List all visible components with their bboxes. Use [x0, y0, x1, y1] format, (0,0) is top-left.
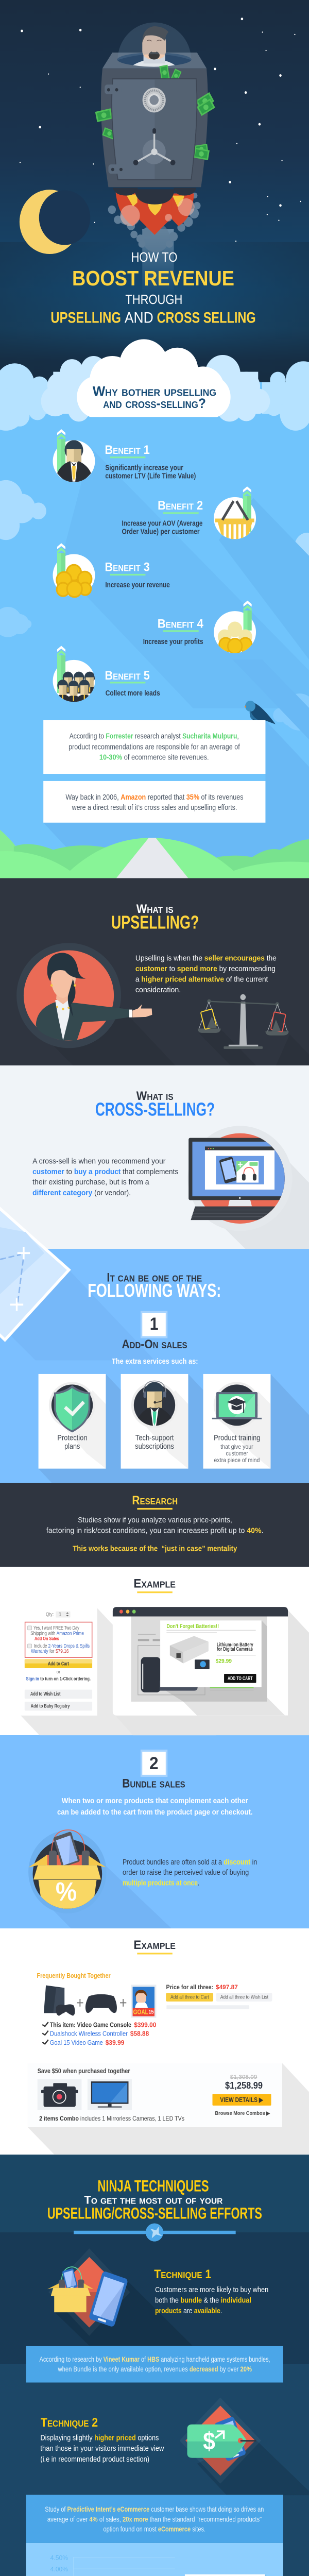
heading: following ways: FOLLOWING WAYS: [88, 1280, 221, 1301]
panel: bundle examples [28, 1983, 309, 2346]
heading: add-on sales: Add-On sales [122, 1338, 187, 1351]
heading: what is upselling: UPSELLING? [111, 912, 199, 933]
hinges [105, 84, 125, 174]
technique 2: than those in your visitors immediate view [40, 2445, 164, 2453]
text: bundle discount [123, 1858, 257, 1888]
background: ways blue section [0, 1249, 309, 1483]
panel: techniques 1-2 evidence [26, 2346, 309, 2576]
panel: research: Research [132, 1494, 178, 1507]
heading: ninja techniques [47, 2178, 262, 2223]
stars [20, 18, 301, 242]
panel: product order box: Add On Sales [35, 1636, 59, 1641]
technique 1: both the bundle & the individual [155, 2296, 251, 2305]
popup card: Don't Forget Batteries!! [166, 1623, 219, 1630]
panel: hero [20, 18, 301, 327]
number badge 1: 1 [150, 1314, 159, 1334]
heading: ninja techniques: To get the most out of your [84, 2194, 223, 2207]
icon: rocket nozzles [113, 188, 197, 205]
price and buttons: Add all three to Cart [170, 1994, 209, 2001]
astronaut [133, 26, 175, 67]
callout: vineet kumar research: According to research by Vineet Kumar of HBS analyzing handheld game systems bundles, [40, 2355, 270, 2363]
technique 1 [47, 2248, 268, 2346]
cloud right [273, 693, 309, 731]
cash [95, 65, 215, 160]
icon: camera thumbnail [38, 2079, 81, 2110]
card: tech-support: Tech-support [135, 1434, 174, 1443]
panel: bundle sales [28, 1750, 257, 1979]
long shadow: combo panel [28, 2063, 309, 2155]
icon: shopping basket [214, 486, 256, 540]
popup card [160, 1620, 262, 1687]
text: bundle discount: order to raise the perceived value of buying [123, 1869, 249, 1877]
background: bundle blue section [0, 1735, 309, 1928]
technique 2: (i.e in recommended product section) [40, 2455, 149, 2464]
benefit 1: Significantly increase your [105, 464, 183, 472]
text: cross-sell definition: A cross-sell is when you recommend your [32, 1157, 166, 1165]
chart legend [185, 2574, 265, 2576]
icon: bundle with tablet [47, 2248, 192, 2346]
icon: support agent [138, 1381, 171, 1426]
icon: plus [77, 1999, 126, 2007]
background: cross-selling light section [0, 1065, 309, 1249]
panel: scales and cross-selling [0, 994, 309, 1360]
background: navy band two [0, 2232, 309, 2364]
cloud band [0, 355, 309, 431]
number badge 1 [141, 1311, 167, 1338]
panel: combo offer: 2 items Combo includes 1 Mirrorless Cameras, 1 LED TVs [39, 2116, 184, 2122]
long shadows behind example panels [21, 1608, 309, 1735]
benefit 5: Benefit 5 [105, 668, 150, 682]
icon: gold coins [53, 543, 95, 597]
title: AND [125, 310, 153, 327]
icon: businessman [53, 429, 95, 483]
text: frequently bought together: Frequently Bought Together [37, 1972, 111, 1979]
icon: team of people [53, 646, 96, 702]
panel: product order box [21, 1608, 97, 1716]
callout: amazon stat: were a direct result of it’s cross sales and upselling efforts. [72, 804, 237, 812]
card: product training: customer [226, 1450, 248, 1457]
callout: amazon stat [43, 781, 265, 823]
illustration: computer with cross-sell [188, 1126, 309, 1249]
heading: following ways [88, 1271, 221, 1301]
panel: research: factoring in risk/cost conditions, you can increases profit up to 40%. [46, 1527, 264, 1535]
panel: product order box: Yes, I want FREE Two Day [33, 1625, 79, 1631]
text: upselling definition [135, 954, 277, 994]
long shadows behind benefits [59, 448, 309, 708]
icon: game box [131, 1985, 156, 2018]
bar chart [50, 2554, 175, 2576]
title: BOOST REVENUE [72, 267, 234, 290]
callout: vineet kumar research [26, 2346, 283, 2382]
text: bundle definition: can be added to the cart from the product page or checkout. [57, 1808, 253, 1817]
panel: benefit 5, statistics and hills [0, 646, 309, 1065]
benefit 3: Increase your revenue [105, 581, 170, 589]
title: UPSELLING [50, 310, 121, 327]
card: protection plans [39, 1374, 208, 1483]
panel: research [46, 1494, 264, 1553]
callout: vineet kumar research: when Bundle is the only available option, revenues decreased by over 20% [58, 2365, 252, 2373]
heading: what is upselling: What is [136, 902, 174, 916]
panel: product order box: Add to Baby Registry [31, 1703, 70, 1709]
title: THROUGH [125, 292, 182, 307]
panel: combo offer: $1,308.99 [230, 2074, 257, 2080]
background: hero night sky [0, 0, 309, 392]
technique 1: products are available. [155, 2307, 222, 2315]
text: bundle definition [57, 1797, 253, 1817]
panel: predictive intent study with chart: Study of Predictive Intent’s eCommerce customer base shows that doing so drives an [45, 2505, 264, 2513]
callout: forrester stat: 10-30% of ecommerce site revenues. [99, 753, 209, 762]
popup card: ADD TO CART [228, 1676, 253, 1682]
technique 1: Technique 1 [154, 2267, 211, 2281]
background: upselling dark section [0, 878, 309, 1065]
background: hero side vignette [0, 242, 309, 392]
bar chart: 4.00% [50, 2566, 68, 2573]
card: tech-support: subscriptions [135, 1442, 174, 1451]
white heading cloud [77, 339, 231, 418]
heading: what is upselling [111, 902, 199, 933]
panel: product order box: Qty: [46, 1612, 54, 1618]
panel: product order box: Warranty for $79.16 [31, 1649, 69, 1654]
list: bundle items: $58.88 [130, 2030, 149, 2038]
hills and road [0, 830, 309, 878]
benefit 4 [143, 601, 256, 654]
icon: crescent moon [20, 190, 90, 254]
panel: predictive intent study with chart: option found on most eCommerce sites. [104, 2525, 205, 2533]
panel: product order box: Add to Cart [48, 1661, 70, 1667]
panel: combo offer: Browse More Combos ▶ [215, 2111, 271, 2116]
safe door [112, 79, 197, 180]
icon: safe rocket [95, 22, 215, 187]
text: cross-sell definition: their existing purchase, but is from a [32, 1178, 149, 1187]
safe top [102, 53, 207, 69]
benefit 4: Increase your profits [143, 638, 203, 646]
number badge 2: 2 [149, 1754, 159, 1773]
panel: product order box: Shipping with Amazon Prime [30, 1631, 84, 1637]
callout: forrester stat: According to Forrester research analyst Sucharita Mulpuru, [70, 732, 239, 741]
panel: product order box: Sign in to turn on 1-Click ordering. [26, 1676, 91, 1682]
heading: bundle sales: Bundle sales [122, 1777, 185, 1791]
text: bundle definition: When two or more products that complement each other [62, 1797, 248, 1805]
text: upselling definition: customer to spend more by recommending [135, 965, 276, 973]
icon: wireless controller [85, 1994, 117, 2013]
panel: product order box: Add to Wish List [30, 1691, 61, 1697]
list: bundle items: $399.00 [134, 2021, 156, 2028]
icon: game box: 15 [149, 2009, 154, 2015]
panel: research: This works because of the “just in case” mentality [73, 1545, 237, 1553]
callout: forrester stat: product recommendations are responsible for an average of [68, 743, 240, 751]
benefit 2: Benefit 2 [158, 498, 203, 512]
list: bundle items: Goal 15 Video Game [50, 2039, 103, 2046]
heading: example 2: Example [133, 1938, 176, 1952]
combination dial [143, 88, 166, 112]
heading: following ways: It can be one of the [107, 1271, 202, 1285]
number badge 2 [141, 1750, 167, 1777]
price and buttons: Price for all three: [166, 1983, 213, 1991]
text: cross-sell definition [32, 1157, 178, 1197]
panel: combo offer: VIEW DETAILS ▶ [220, 2096, 264, 2104]
icon: price tag: $ [203, 2427, 215, 2455]
panel: product order box: or [57, 1669, 60, 1674]
price and buttons: $497.87 [216, 1983, 238, 1991]
panel: add-on sales [21, 1311, 309, 1735]
callout: amazon stat: Way back in 2006, Amazon reported that 35% of its revenues [65, 793, 244, 802]
card: product training [203, 1374, 309, 1483]
text: upselling definition: a higher priced alternative of the current [135, 975, 268, 984]
technique 2: Displaying slightly higher priced options [40, 2434, 159, 2443]
panel: predictive intent study with chart: average of over 4% of sales, 20x more than the standard "recommended products" [47, 2515, 262, 2523]
icon: shield [54, 1385, 90, 1432]
side clouds [0, 480, 309, 637]
heading: why bother: Why bother upselling [93, 383, 216, 399]
title: CROSS SELLING [157, 310, 256, 327]
card: tech-support [121, 1374, 290, 1483]
long shadow: chart legend [185, 2574, 283, 2576]
benefit 1 [53, 429, 196, 483]
text: bundle discount: Product bundles are often sold at a discount in [123, 1858, 257, 1867]
heading: what is cross-selling: What is [136, 1089, 174, 1103]
panel: combo offer: Save $50 when purchased together [38, 2067, 130, 2075]
icon: game console [44, 1985, 75, 2016]
icon: price tag [180, 2397, 309, 2495]
benefit 3 [53, 543, 170, 597]
long shadows behind boxes [43, 659, 309, 859]
benefit 4: Benefit 4 [158, 617, 203, 631]
divider with shuriken [74, 2224, 236, 2242]
text: cross-sell definition: different category (or vendor). [32, 1189, 131, 1197]
heading: what is cross-selling: CROSS-SELLING? [95, 1099, 215, 1120]
panel: browser popup example [113, 1607, 288, 1719]
icon: discount bundle box [28, 1830, 171, 1928]
illustration: balance scales [198, 994, 309, 1065]
text: upselling definition: consideration. [135, 986, 181, 994]
card: product training: Product training [214, 1434, 260, 1443]
icon: discount bundle box: % [56, 1877, 77, 1906]
illustration: map fragment [0, 1201, 154, 1360]
panel: combo offer [28, 2063, 282, 2127]
benefit 2: Order Value) per customer [122, 528, 200, 536]
icon: rocket flames [116, 192, 195, 235]
icon: profit coins [214, 601, 256, 654]
background: bundle example white section [0, 1928, 309, 2155]
heading: why bother [93, 383, 216, 411]
heading: ninja techniques: NINJA TECHNIQUES [97, 2178, 209, 2195]
card: product training: extra piece of mind [214, 1456, 260, 1464]
technique 2 [40, 2397, 309, 2495]
text: cross-sell definition: customer to buy a product that complements [32, 1167, 178, 1176]
illustration: saleswoman [16, 943, 176, 1065]
card: protection plans: Protection [57, 1434, 88, 1443]
panel: product order box: 1 [59, 1612, 62, 1618]
technique 1: Customers are more likely to buy when [155, 2286, 268, 2294]
panel: product order box: Include 2-Years Drops & Spills [33, 1643, 90, 1649]
icon: game box: GOAL [133, 2008, 148, 2015]
heading: what is cross-selling [95, 1089, 215, 1120]
background: navy band three [0, 2364, 309, 2576]
background: sky [0, 382, 309, 878]
icon: tv thumbnail [88, 2079, 132, 2110]
heading: example 1: Example [133, 1577, 176, 1591]
list: bundle items: $39.99 [106, 2039, 124, 2046]
heading: why bother: and cross-selling? [103, 395, 206, 411]
subheading: extra services: The extra services such as: [112, 1358, 198, 1366]
benefit 2: Increase your AOV (Average [122, 519, 202, 528]
icon: smoke [108, 193, 201, 297]
icon: laptop with graduation cap [212, 1392, 262, 1419]
benefit 1: customer LTV (Life Time Value) [105, 472, 196, 481]
list: bundle items [42, 2021, 156, 2046]
bar chart: 4.50% [50, 2554, 68, 2562]
dome [117, 22, 191, 60]
card: product training: that give your [220, 1443, 253, 1450]
popup card: $29.99 [216, 1658, 232, 1665]
list: bundle items: This item: Video Game Console [50, 2021, 131, 2028]
title [50, 250, 256, 327]
popup card: for Digital Cameras [217, 1647, 253, 1652]
list: bundle items: Dualshock Wireless Controller [50, 2030, 128, 2038]
panel: research: Studies show if you analyze various price-points, [78, 1516, 232, 1524]
text: bundle discount: multiple products at once. [123, 1879, 199, 1888]
benefit 2 [122, 486, 256, 540]
price and buttons [166, 1983, 272, 2009]
panel: why bother (benefits) [0, 339, 309, 659]
technique 2: Technique 2 [41, 2416, 98, 2430]
text: upselling definition: Upselling is when the seller encourages the [135, 954, 277, 963]
background: example white section [0, 1567, 309, 1735]
popup card: Lithium-Ion Battery [217, 1642, 253, 1648]
wheel handle [133, 128, 176, 165]
background: navy band one [0, 2155, 309, 2232]
price and buttons: Add all three to Wish List [220, 1994, 268, 2001]
panel: predictive intent study with chart [26, 2495, 283, 2576]
card: protection plans: plans [64, 1442, 80, 1451]
icon: bird [244, 701, 276, 724]
benefit 3: Benefit 3 [105, 560, 150, 574]
background: research section [0, 1483, 309, 1567]
benefit 1: Benefit 1 [105, 443, 150, 456]
panel: combo offer: $1,258.99 [225, 2080, 263, 2091]
callout: forrester stat [43, 720, 265, 774]
benefit 5: Collect more leads [106, 689, 160, 698]
title: HOW TO [131, 250, 177, 265]
benefit 5 [53, 646, 160, 702]
